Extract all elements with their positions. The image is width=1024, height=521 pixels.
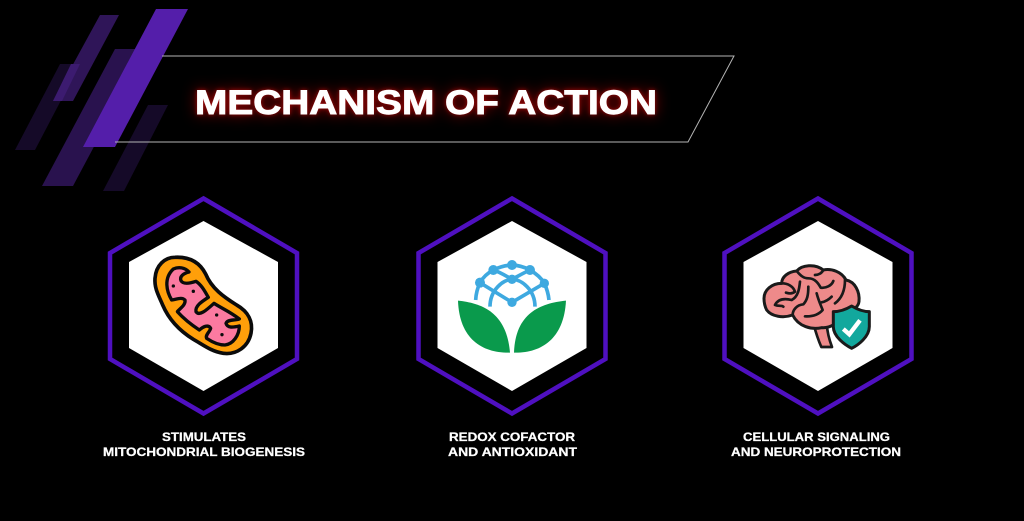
white hexagon (744, 221, 892, 391)
white hexagon (438, 221, 586, 391)
label: STIMULATES (162, 430, 246, 444)
label (731, 430, 901, 459)
hexagon frame (724, 198, 912, 414)
label: AND NEUROPROTECTION (731, 445, 901, 459)
label (448, 430, 578, 459)
icon: molecule flower (458, 260, 566, 353)
hexagon frame (418, 198, 606, 414)
label: REDOX COFACTOR (449, 430, 575, 444)
icon: brain with shield (764, 266, 869, 348)
panel: mitochondrial biogenesis (103, 198, 305, 459)
label: MITOCHONDRIAL BIOGENESIS (103, 445, 305, 459)
decorative diagonal stripes (15, 9, 188, 191)
title banner (115, 56, 734, 142)
label: AND ANTIOXIDANT (448, 445, 578, 459)
panel: redox cofactor (418, 198, 606, 459)
label: CELLULAR SIGNALING (743, 430, 890, 444)
label (103, 430, 305, 459)
icon: mitochondrion (155, 257, 252, 354)
white hexagon (129, 221, 278, 391)
panel: cellular signaling (724, 198, 912, 459)
hexagon frame (110, 198, 297, 414)
title: MECHANISM OF ACTION (195, 84, 657, 122)
